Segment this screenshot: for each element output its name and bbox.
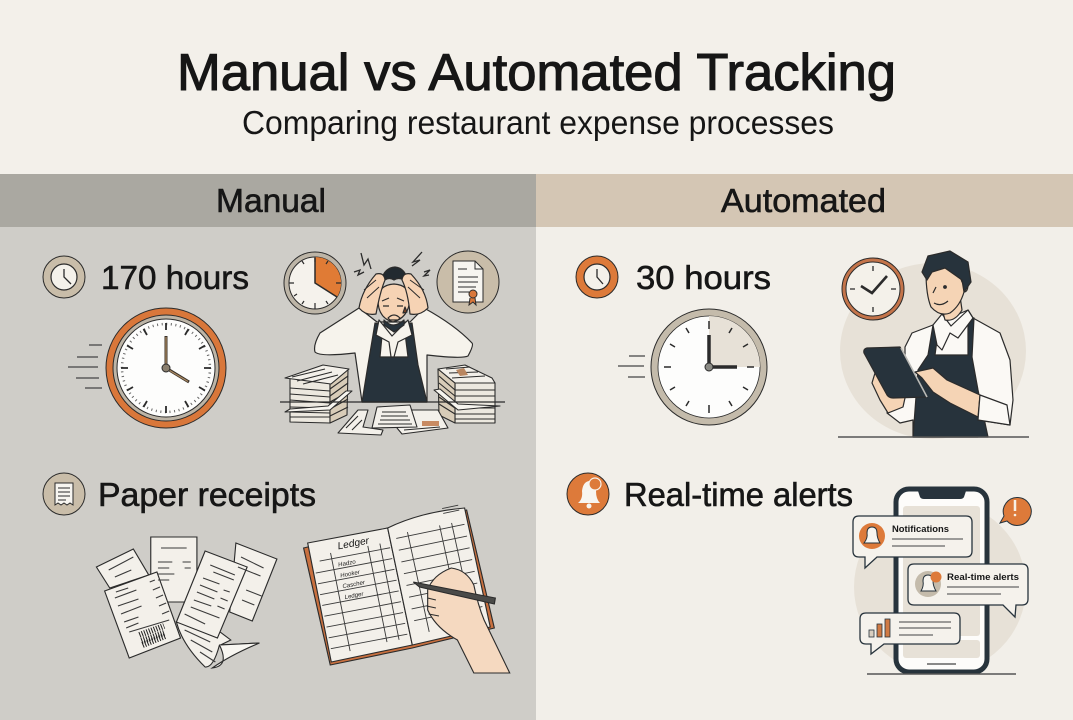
label: real-time alerts: Real-time alerts [624, 476, 853, 513]
background circle: worker [840, 263, 1026, 439]
illustration: pile of receipts [96, 537, 277, 668]
ground line [838, 436, 1029, 438]
illustration: paper stack left [285, 365, 352, 423]
illustration: ledger and writing hand: Cascher [342, 580, 367, 590]
header: automated [536, 174, 1073, 227]
icon: alert badge [567, 473, 609, 515]
header: manual: Manual [216, 182, 326, 219]
icon: alert bubble [1000, 497, 1031, 525]
icon: receipt badge [43, 473, 85, 515]
ground line [867, 673, 1016, 675]
table edge [280, 401, 505, 403]
stat: 30 hours: 30 hours [636, 260, 771, 297]
panel: automated [567, 251, 1031, 674]
icon: small clock, automated [576, 256, 618, 298]
illustration: ledger and writing hand: Ledger [344, 591, 365, 601]
callout: chart message [860, 613, 960, 654]
illustration: ledger and writing hand: Ledger [337, 536, 371, 552]
icon: wall clock with check [842, 258, 904, 320]
header: manual [0, 174, 536, 227]
icon: small clock, manual [43, 256, 85, 298]
illustration: stressed worker [315, 267, 472, 402]
illustration: ledger and writing hand: Hadzo [338, 559, 357, 569]
illustration: ledger and writing hand: Hooker [340, 570, 361, 579]
title: Manual vs Automated Tracking [177, 44, 896, 102]
illustration: confident worker with tablet [864, 251, 1013, 437]
callout: real-time alerts: Real-time alerts [947, 572, 1019, 583]
subtitle: Comparing restaurant expense processes [242, 104, 834, 141]
icon: large clock with speed lines [68, 308, 226, 428]
callout: notifications [853, 516, 972, 568]
illustration: loose papers on desk [338, 405, 448, 435]
panel: manual [43, 251, 510, 673]
illustration: ledger and writing hand [304, 505, 510, 673]
icon: stress lightning marks [354, 252, 430, 276]
header: automated: Automated [721, 183, 886, 220]
illustration: paper stack right [434, 365, 500, 423]
callout: notifications: Notifications [892, 524, 949, 535]
label: paper receipts: Paper receipts [98, 477, 316, 514]
callout: real-time alerts [908, 564, 1028, 617]
illustration: phone [896, 489, 987, 672]
stat: 170 hours: 170 hours [101, 260, 249, 297]
icon: document with seal [437, 251, 499, 313]
icon: stress clock [284, 252, 346, 314]
icon: 30 hour clock with speed lines [618, 309, 767, 425]
background circle: phone [854, 501, 1026, 673]
